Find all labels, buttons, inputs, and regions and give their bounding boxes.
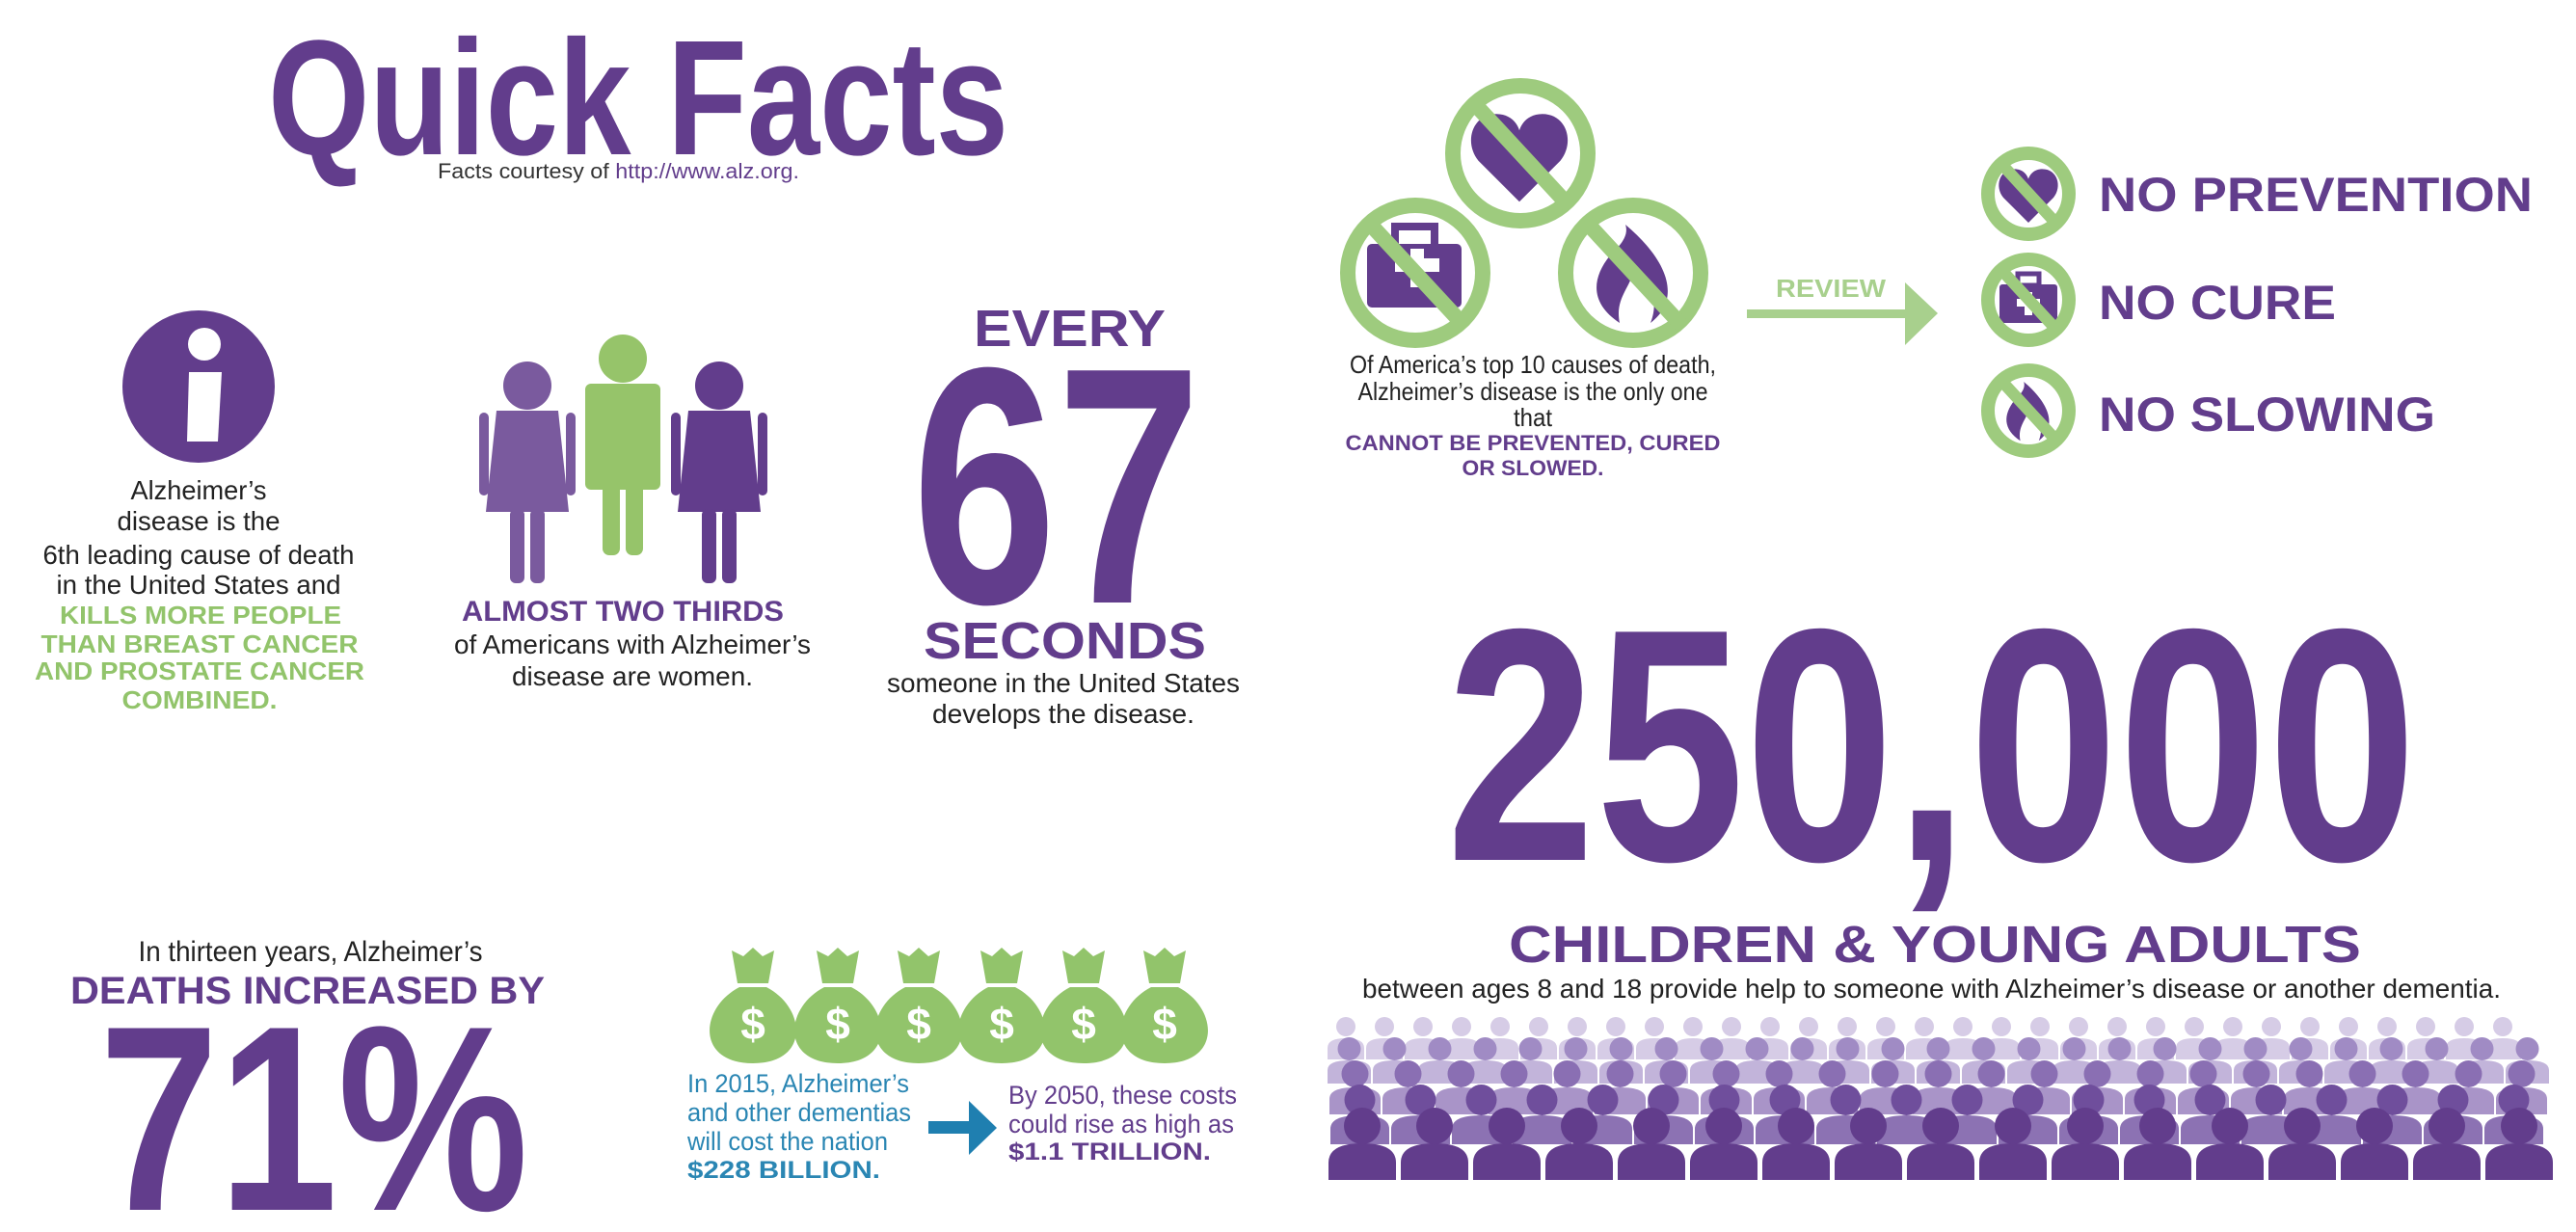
item: no slowing: NO SLOWING (2099, 388, 2435, 442)
title: Quick Facts (268, 7, 1008, 190)
text: only one that cannot be prevented: OR SLOWED. (1462, 456, 1604, 480)
icon: money bags: $ (825, 999, 850, 1049)
icon: money bags: $ (906, 999, 931, 1049)
text: only one that cannot be prevented: that (1514, 403, 1553, 432)
icon: money bags: $ (1152, 999, 1177, 1049)
text: 2050 cost: $1.1 TRILLION. (1008, 1138, 1211, 1165)
text: two thirds women: ALMOST TWO THIRDS (462, 596, 784, 628)
icon: no heart (1453, 86, 1588, 221)
stat: deaths increased 71%: In thirteen years, Alzheimer’s (139, 936, 482, 968)
text: two thirds women: of Americans with Alzheimer’s (454, 629, 811, 659)
item: no slowing (1988, 370, 2435, 451)
stat: deaths increased 71%: DEATHS INCREASED BY (70, 970, 545, 1012)
icon: no medical kit (1348, 205, 1483, 340)
stat: 250,000 children: CHILDREN & YOUNG ADULTS (1509, 916, 2361, 974)
text: 2015 cost: and other dementias (687, 1098, 911, 1127)
icon: money bags (710, 948, 1208, 1063)
text: 2050 cost (1008, 1081, 1237, 1165)
icon: crowd of people (1327, 1017, 2553, 1180)
text: 6th leading cause: AND PROSTATE CANCER (35, 656, 364, 685)
icon: money bags: $ (740, 999, 765, 1049)
text: 6th leading cause: KILLS MORE PEOPLE (60, 601, 341, 629)
stat: every 67 seconds: develops the disease. (932, 699, 1194, 729)
stat: 250,000 children: between ages 8 and 18 provide help to someone with Alzheimer’s disease or another dementia. (1362, 974, 2501, 1004)
text: only one that cannot be prevented: Alzheimer’s disease is the only one (1357, 377, 1708, 406)
text: 2050 cost: By 2050, these costs (1008, 1081, 1237, 1110)
icon: money bags: $ (989, 999, 1014, 1049)
stat: every 67 seconds: someone in the United States (887, 668, 1240, 698)
stat: every 67 seconds: SECONDS (924, 612, 1206, 670)
icon: money bags: $ (1071, 999, 1096, 1049)
arrow: blue (928, 1101, 997, 1155)
item: no prevention (1988, 153, 2533, 234)
arrow: review: REVIEW (1776, 274, 1886, 303)
item: no cure: NO CURE (2099, 276, 2336, 330)
text: 6th leading cause: disease is the (118, 506, 280, 536)
item: no cure (1988, 259, 2336, 340)
icon: people (two women, one man) (479, 335, 767, 583)
text: 6th leading cause: Alzheimer’s (131, 475, 266, 505)
text: 6th leading cause: THAN BREAST CANCER (40, 629, 359, 658)
text: only one that cannot be prevented: CANNOT BE PREVENTED, CURED (1346, 431, 1720, 455)
list: no prevention, no cure, no slowing (1988, 153, 2533, 451)
text: 2050 cost: could rise as high as (1008, 1110, 1234, 1138)
icon: man (585, 335, 660, 555)
text: only one that cannot be prevented (1346, 350, 1720, 480)
text: 2015 cost (686, 1069, 911, 1184)
text: two thirds women (454, 596, 811, 691)
text: 2015 cost: will cost the nation (686, 1127, 888, 1156)
text: 6th leading cause: 6th leading cause of death (42, 540, 355, 570)
arrow: review (1747, 274, 1938, 345)
text: only one that cannot be prevented: Of America’s top 10 causes of death, (1350, 350, 1716, 379)
stat: every 67 seconds: EVERY (974, 300, 1166, 358)
text: 2015 cost: $228 BILLION. (687, 1157, 880, 1184)
item: no prevention: NO PREVENTION (2099, 168, 2533, 222)
text: two thirds women: disease are women. (512, 661, 753, 691)
text: 2015 cost: In 2015, Alzheimer’s (687, 1069, 909, 1098)
stat: every 67 seconds: 67 (912, 298, 1201, 675)
text: 6th leading cause: in the United States and (56, 570, 341, 600)
icon: woman left (479, 362, 576, 583)
text: 6th leading cause (35, 475, 364, 714)
text: 6th leading cause: COMBINED. (121, 685, 278, 714)
icon: woman right (671, 362, 767, 583)
icon: info (122, 310, 275, 463)
subtitle source: Facts courtesy of http://www.alz.org. (438, 159, 799, 183)
icon: no flame (1566, 205, 1701, 340)
